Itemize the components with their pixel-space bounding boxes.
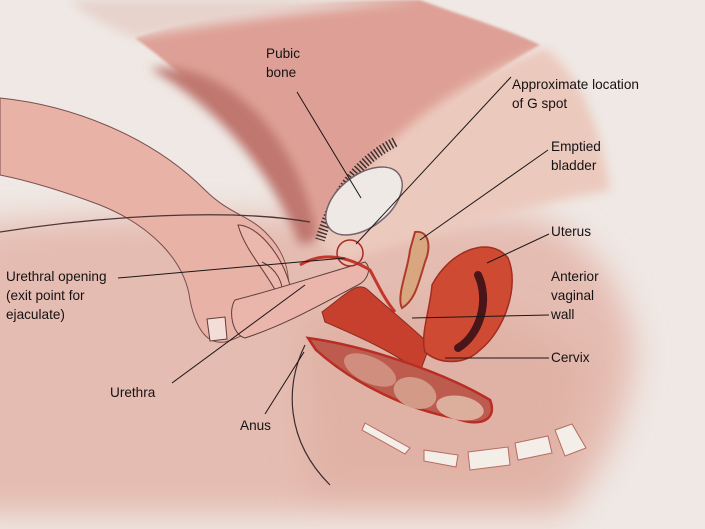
pubic bone bbox=[313, 153, 415, 249]
label: pubic bone: bone bbox=[266, 65, 296, 80]
body: upper thigh bbox=[135, 0, 610, 262]
body: upper left shaded area bbox=[70, 0, 420, 38]
anus contour line bbox=[292, 345, 330, 485]
urethra tube bbox=[300, 257, 395, 312]
label: emptied bladder: bladder bbox=[551, 158, 597, 173]
label: anterior vaginal wall: vaginal bbox=[551, 288, 594, 303]
label: anterior vaginal wall: wall bbox=[550, 307, 574, 322]
rectum bbox=[308, 338, 492, 424]
label: urethra: Urethra bbox=[110, 385, 156, 400]
vagina bbox=[322, 287, 430, 372]
label: anus: Anus bbox=[240, 418, 271, 433]
label: uterus: Uterus bbox=[551, 224, 591, 239]
label: urethral opening: (exit point for bbox=[6, 288, 85, 303]
label: approximate location of G spot: Approximate location bbox=[512, 77, 639, 92]
body: lower skin area bbox=[0, 215, 635, 515]
uterus bbox=[424, 247, 512, 362]
label: cervix: Cervix bbox=[551, 350, 590, 365]
pubic hair shading bbox=[320, 142, 395, 240]
emptied bladder bbox=[400, 232, 428, 308]
uterine cavity bbox=[458, 275, 483, 348]
label: pubic bone: Pubic bbox=[266, 46, 300, 61]
hand and forearm bbox=[0, 98, 369, 342]
label: emptied bladder: Emptied bbox=[551, 139, 601, 154]
label: urethral opening: ejaculate) bbox=[6, 307, 65, 322]
spine / coccyx bbox=[362, 423, 586, 470]
leader lines bbox=[118, 77, 549, 414]
label: urethral opening: Urethral opening bbox=[6, 269, 107, 284]
thigh contour line bbox=[0, 215, 310, 232]
G spot location circle bbox=[337, 240, 363, 266]
label: anterior vaginal wall: Anterior bbox=[551, 269, 599, 284]
label: approximate location of G spot: of G spot bbox=[512, 96, 567, 111]
